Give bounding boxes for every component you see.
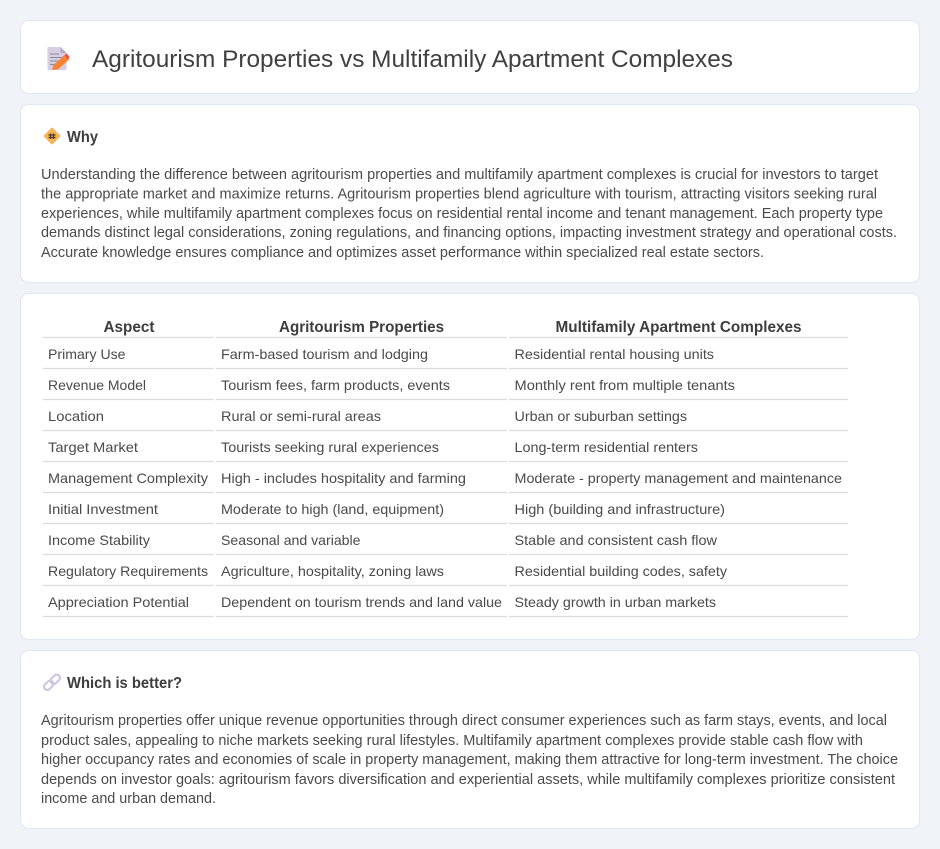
row: location: [48, 408, 687, 424]
row: appreciation potential: Steady growth in urban markets: [514, 594, 716, 610]
row: management complexity: Management Complexity: [48, 470, 208, 486]
row: management complexity: Moderate - property management and maintenance: [514, 470, 842, 486]
heading: why: Why: [67, 129, 98, 146]
row: location: Location: [48, 408, 104, 424]
row: regulatory requirements: Agriculture, hospitality, zoning laws: [221, 563, 444, 579]
row: appreciation potential: Appreciation Potential: [48, 594, 189, 610]
title: Agritourism Properties vs Multifamily Apartment Complexes: [92, 46, 733, 73]
row: initial investment: Initial Investment: [48, 501, 158, 517]
row: revenue model: Tourism fees, farm products, events: [221, 377, 450, 393]
text block: why paragraph: Accurate knowledge ensures compliance and optimizes asset performance within specialized real estate sectors.: [41, 245, 764, 261]
row: primary use: Residential rental housing units: [514, 346, 714, 362]
text block: why paragraph: demands distinct legal considerations, zoning regulations, and financing options, impacting investment strategy and operational costs.: [41, 225, 897, 241]
panel: why: [20, 104, 920, 282]
icon: orange diamond: [44, 128, 60, 144]
row: regulatory requirements: [48, 563, 727, 579]
row: primary use: Primary Use: [48, 346, 126, 362]
text block: why paragraph: the appropriate market and maximize returns. Agritourism properties blend agriculture with tourism, attracting visitors seeking rural: [41, 186, 877, 202]
text block: which is better paragraph: Agritourism properties offer unique revenue opportunities through direct consumer experiences such as farm stays, events, and local: [41, 713, 887, 729]
text block: why paragraph: Understanding the difference between agritourism properties and multifamily apartment complexes is crucial for investors to target: [41, 167, 878, 183]
text block: why paragraph: experiences, while multifamily apartment complexes focus on residential rental income and tenant management. Each property type: [41, 206, 883, 222]
row: target market: Tourists seeking rural experiences: [221, 439, 439, 455]
text block: which is better paragraph: income and urban demand.: [41, 791, 216, 807]
row: income stability: [48, 532, 718, 548]
table header row: Aspect: [104, 319, 154, 336]
text block: which is better paragraph: product sales, appealing to niche markets seeking rural lifestyles. Multifamily apartment complexes provide stable cash flow with: [41, 733, 863, 749]
row: primary use: Farm-based tourism and lodging: [221, 346, 428, 362]
text block: why paragraph: [41, 167, 897, 261]
row: initial investment: High (building and infrastructure): [514, 501, 725, 517]
table header row: Agritourism Properties: [279, 319, 444, 336]
text block: which is better paragraph: [41, 713, 898, 807]
panel: title header: [20, 20, 920, 94]
row: income stability: Income Stability: [48, 532, 150, 548]
row: revenue model: Monthly rent from multiple tenants: [514, 377, 735, 393]
table header row: Multifamily Apartment Complexes: [556, 319, 802, 336]
icon: chain link: [43, 673, 61, 691]
text block: which is better paragraph: depends on investor goals: agritourism favors diversification and experiential assets, while multifamily complexes prioritize consistent: [41, 772, 895, 788]
icon: memo with pencil: [48, 47, 69, 70]
row: target market: Target Market: [48, 439, 138, 455]
table header row: [104, 319, 802, 336]
row: appreciation potential: [48, 594, 716, 610]
row: location: Urban or suburban settings: [514, 408, 687, 424]
row: income stability: Seasonal and variable: [221, 532, 361, 548]
row: target market: Long-term residential renters: [514, 439, 698, 455]
row: regulatory requirements: Regulatory Requirements: [48, 563, 208, 579]
row: initial investment: Moderate to high (land, equipment): [221, 501, 444, 517]
panel: comparison table: [20, 294, 920, 640]
row: regulatory requirements: Residential building codes, safety: [514, 563, 727, 579]
row: management complexity: High - includes hospitality and farming: [221, 470, 466, 486]
row: revenue model: Revenue Model: [48, 377, 146, 393]
text block: which is better paragraph: higher occupancy rates and economies of scale in property management, making them attractive for long-term investment. The choice: [41, 752, 898, 768]
row: location: Rural or semi-rural areas: [221, 408, 381, 424]
row: target market: [48, 439, 698, 455]
row: primary use: [48, 346, 714, 362]
heading: which is better: Which is better?: [67, 675, 182, 692]
panel: which is better: [20, 650, 920, 828]
row: initial investment: [48, 501, 725, 517]
row: appreciation potential: Dependent on tourism trends and land value: [221, 594, 502, 610]
row: management complexity: [48, 470, 842, 486]
row: income stability: Stable and consistent cash flow: [514, 532, 718, 548]
row: revenue model: [48, 377, 735, 393]
